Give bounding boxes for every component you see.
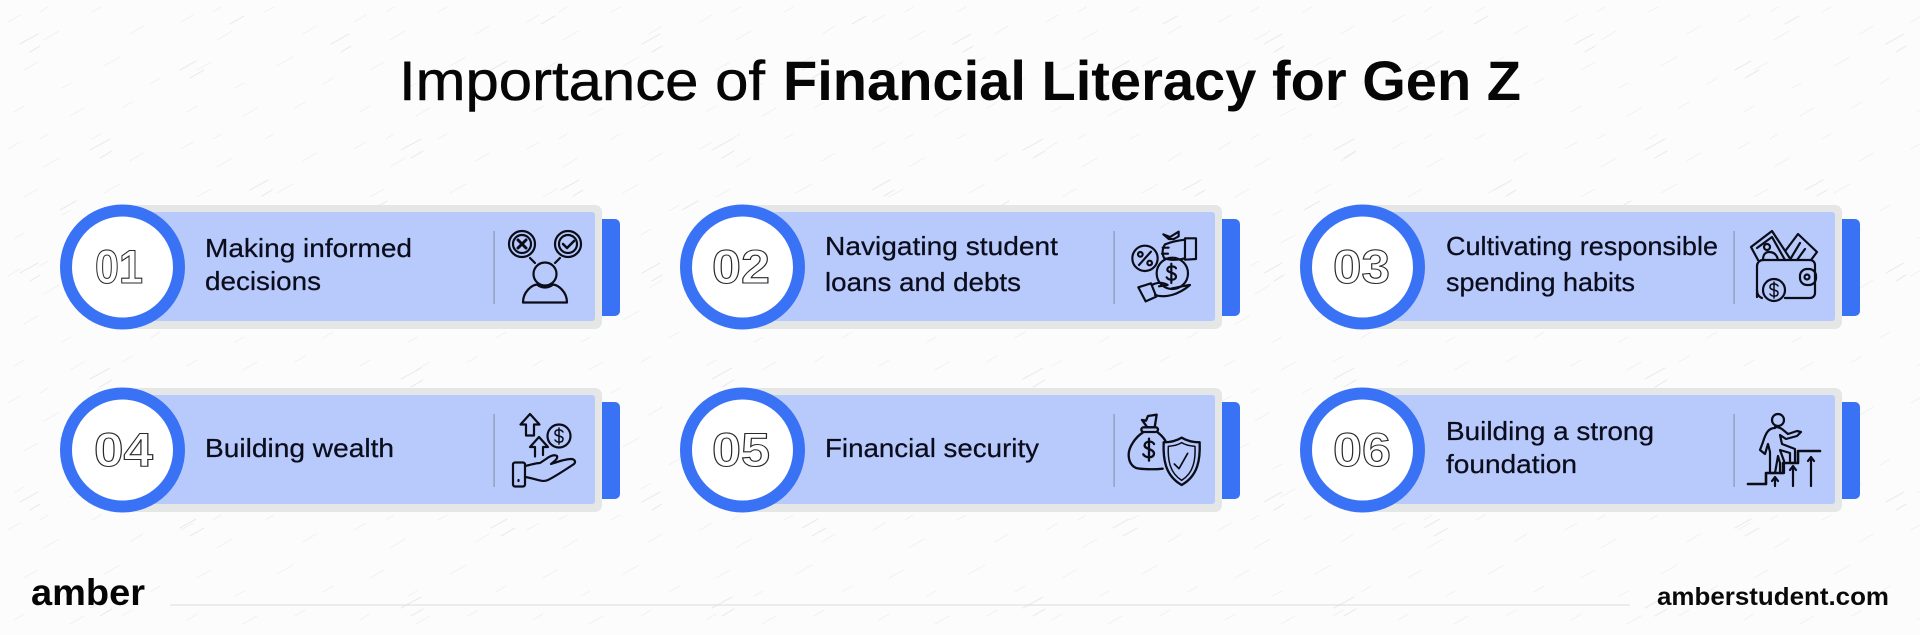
number 02: 02: [712, 240, 770, 293]
label: cultivating responsible spending habits: spending habits: [1446, 267, 1635, 297]
icon: wallet with banknotes and coin: [1751, 231, 1817, 301]
footer website: amberstudent.com: [1657, 583, 1889, 611]
title: Financial Literacy for Gen Z: [783, 49, 1521, 112]
footer logo: amber: amber: [31, 572, 145, 613]
label: building a strong foundation: foundation: [1446, 449, 1577, 479]
title: Importance of: [399, 49, 765, 112]
label: cultivating responsible spending habits: [1446, 231, 1718, 297]
icon: person climbing stairs with arrows: [1748, 414, 1820, 486]
footer divider: [170, 604, 1630, 606]
number 06: 06: [1333, 423, 1391, 476]
label: navigating student loans and debts: loans and debts: [825, 267, 1021, 297]
label: navigating student loans and debts: Navigating student: [825, 231, 1059, 261]
label: making informed decisions: Making informed: [205, 233, 412, 263]
number 03: 03: [1333, 240, 1390, 293]
panel: 04 building wealth: [66, 388, 620, 512]
icon: person choosing between cross and check: [509, 231, 581, 302]
label: building a strong foundation: Building a strong: [1446, 416, 1654, 446]
label: building a strong foundation: [1446, 416, 1654, 479]
panel: 03 cultivating responsible spending habits: [1306, 205, 1860, 329]
label: financial security: Financial security: [825, 433, 1039, 463]
panel: 02 navigating student loans and debts: [686, 205, 1240, 329]
icon: money bag and shield: [1129, 415, 1200, 485]
panel: 01 making informed decisions: [66, 205, 620, 329]
icon: hand with growth arrows and coin: [513, 414, 575, 486]
label: cultivating responsible spending habits: Cultivating responsible: [1446, 231, 1718, 261]
panel: 06 building a strong foundation: [1306, 388, 1860, 512]
number 01: 01: [95, 240, 143, 293]
label: navigating student loans and debts: [825, 231, 1059, 297]
label: building wealth: Building wealth: [205, 433, 394, 463]
number 05: 05: [712, 423, 770, 476]
label: making informed decisions: [205, 233, 412, 296]
title: [399, 49, 1521, 112]
icon: money bag on hand with percent: [1132, 232, 1196, 301]
panel: 05 financial security: [686, 388, 1240, 512]
number 04: 04: [94, 423, 153, 476]
label: making informed decisions: decisions: [205, 266, 321, 296]
